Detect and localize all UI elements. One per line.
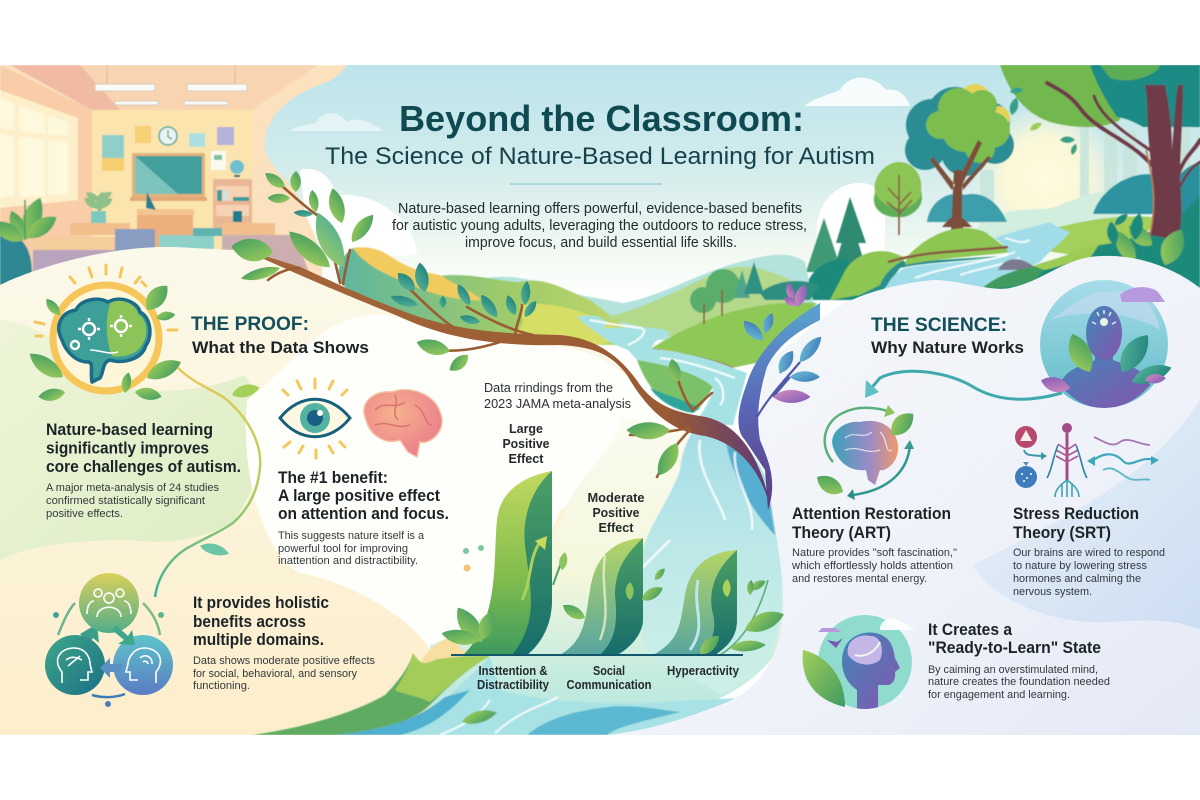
panel: the science background: [607, 256, 1200, 735]
text block: stress reduction theory: [1013, 505, 1165, 598]
text block: ready to learn: nature creates the foundation needed: [928, 676, 1110, 688]
text block: ready to learn: [928, 621, 1110, 701]
text block: stress reduction theory: nervous system.: [1013, 586, 1092, 598]
subtitle: The Science of Nature-Based Learning for Autism: [325, 143, 875, 170]
stream: [885, 222, 1070, 292]
icon: brain with gears: [25, 265, 184, 403]
text block: holistic benefits: Data shows moderate positive effects: [193, 655, 375, 667]
illustration: main tree branch and trunk: [230, 169, 825, 515]
bar: social communication, moderate: [560, 538, 667, 655]
axis labels: Insttention &: [478, 664, 548, 678]
chart: effect sizes from the 2023 JAMA meta-analysis: [440, 381, 787, 692]
text block: ready to learn: It Creates a: [928, 621, 1013, 639]
illustration: clouds: [290, 78, 910, 270]
illustration: distant hills and valley: [338, 247, 820, 425]
text block: number one benefit: inattention and distractibility.: [278, 555, 418, 567]
title: Beyond the Classroom:: [399, 98, 804, 139]
axis labels: Hyperactivity: [667, 664, 739, 678]
big tree right: [1000, 65, 1120, 127]
bar value labels: Positive: [502, 437, 550, 451]
text block: ready to learn: for engagement and learning.: [928, 689, 1070, 701]
text block: ready to learn: By caiming an overstimulated mind,: [928, 664, 1098, 676]
text block: attention restoration theory: which effortlessly holds attention: [791, 560, 953, 572]
text block: attention restoration theory: [791, 505, 957, 585]
text block: attention restoration theory: and restores mental energy.: [792, 573, 927, 585]
section heading: the science: [871, 314, 1024, 357]
axis: [451, 654, 743, 656]
text block: core challenges: [46, 421, 241, 520]
branch leaves: [230, 169, 825, 480]
text block: stress reduction theory: Theory (SRT): [1013, 524, 1111, 542]
text block: number one benefit: powerful tool for improving: [278, 543, 408, 555]
chart caption: 2023 JAMA meta-analysis: [484, 397, 631, 411]
text block: stress reduction theory: hormones and calming the: [1013, 573, 1141, 585]
bar value labels: [502, 422, 645, 535]
icon: eye: [280, 379, 350, 458]
text block: number one benefit: The #1 benefit:: [278, 469, 388, 487]
text block: attention restoration theory: Nature provides "soft fascination,": [792, 547, 957, 559]
background: sky: [265, 65, 1200, 300]
text block: holistic benefits: It provides holistic: [193, 594, 329, 612]
bar value labels: Effect: [508, 452, 544, 466]
section heading: the proof: [191, 316, 368, 353]
text block: holistic benefits: multiple domains.: [193, 631, 324, 649]
bar value labels: Large: [509, 422, 543, 436]
icon: cycle of three heads: [45, 573, 173, 707]
icon: nervous system with stress signals: [1015, 423, 1159, 497]
text block: holistic benefits: functioning.: [193, 680, 250, 692]
axis labels: Communication: [566, 678, 652, 692]
vine connector: [155, 367, 261, 597]
bar value labels: Positive: [592, 506, 640, 520]
foreground hills: [808, 258, 866, 301]
text block: core challenges: core challenges of autism.: [46, 458, 241, 476]
section heading: the science: Why Nature Works: [871, 338, 1024, 357]
text block: holistic benefits: for social, behavioral, and sensory: [193, 668, 357, 680]
illustration: central river and chart ground: [253, 417, 784, 735]
text block: core challenges: positive effects.: [46, 508, 123, 520]
bar: hyperactivity: [653, 550, 787, 659]
text block: holistic benefits: [193, 594, 375, 692]
text block: stress reduction theory: Stress Reduction: [1013, 505, 1139, 523]
text block: number one benefit: A large positive effect: [278, 487, 440, 505]
pines: [806, 197, 866, 272]
text block: core challenges: Nature-based learning: [46, 421, 213, 439]
section heading: the proof: THE PROOF:: [191, 313, 309, 335]
chart caption: [484, 381, 631, 411]
intro text: for autistic young adults, leveraging the outdoors to reduce stress,: [392, 218, 807, 234]
section heading: the proof: What the Data Shows: [192, 338, 369, 357]
illustration: forest on the right: [800, 65, 1200, 300]
panel: the proof background: [0, 247, 690, 735]
illustration: classroom scene: [0, 65, 347, 285]
icon: pink brain: [364, 390, 442, 457]
text block: number one benefit: This suggests nature itself is a: [278, 530, 425, 542]
intro text: improve focus, and build essential life skills.: [465, 235, 737, 251]
text block: number one benefit: [278, 469, 449, 567]
axis labels: [477, 664, 739, 692]
text block: number one benefit: on attention and focus.: [278, 505, 449, 523]
large tree: [905, 84, 1014, 232]
axis labels: Distractibility: [477, 678, 549, 692]
text block: attention restoration theory: Attention Restoration: [792, 505, 951, 523]
icon: ready-to-learn head: [803, 615, 915, 712]
chart caption: Data rrindings from the: [484, 381, 613, 395]
text block: stress reduction theory: to nature by lowering stress: [1013, 560, 1147, 572]
text block: core challenges: significantly improves: [46, 440, 209, 458]
text block: core challenges: confirmed statistically significant: [46, 495, 206, 507]
bar value labels: Moderate: [588, 491, 645, 505]
text block: attention restoration theory: Theory (ART): [792, 524, 891, 542]
small tree: [874, 162, 922, 235]
bar: inattention and distractibility, large: [440, 471, 569, 655]
text block: holistic benefits: benefits across: [193, 613, 306, 631]
text block: ready to learn: "Ready-to-Learn" State: [928, 639, 1101, 657]
intro text: [392, 201, 807, 251]
text block: stress reduction theory: Our brains are wired to respond: [1013, 547, 1165, 559]
section heading: the science: THE SCIENCE:: [871, 314, 1007, 336]
text block: core challenges: A major meta-analysis of 24 studies: [46, 482, 219, 494]
bar value labels: Effect: [598, 521, 634, 535]
intro text: Nature-based learning offers powerful, evidence-based benefits: [398, 201, 802, 217]
icon: brain with restoration arrows: [813, 405, 919, 500]
icon: head in a nature circle with arrow: [865, 280, 1174, 408]
axis labels: Social: [593, 664, 625, 678]
